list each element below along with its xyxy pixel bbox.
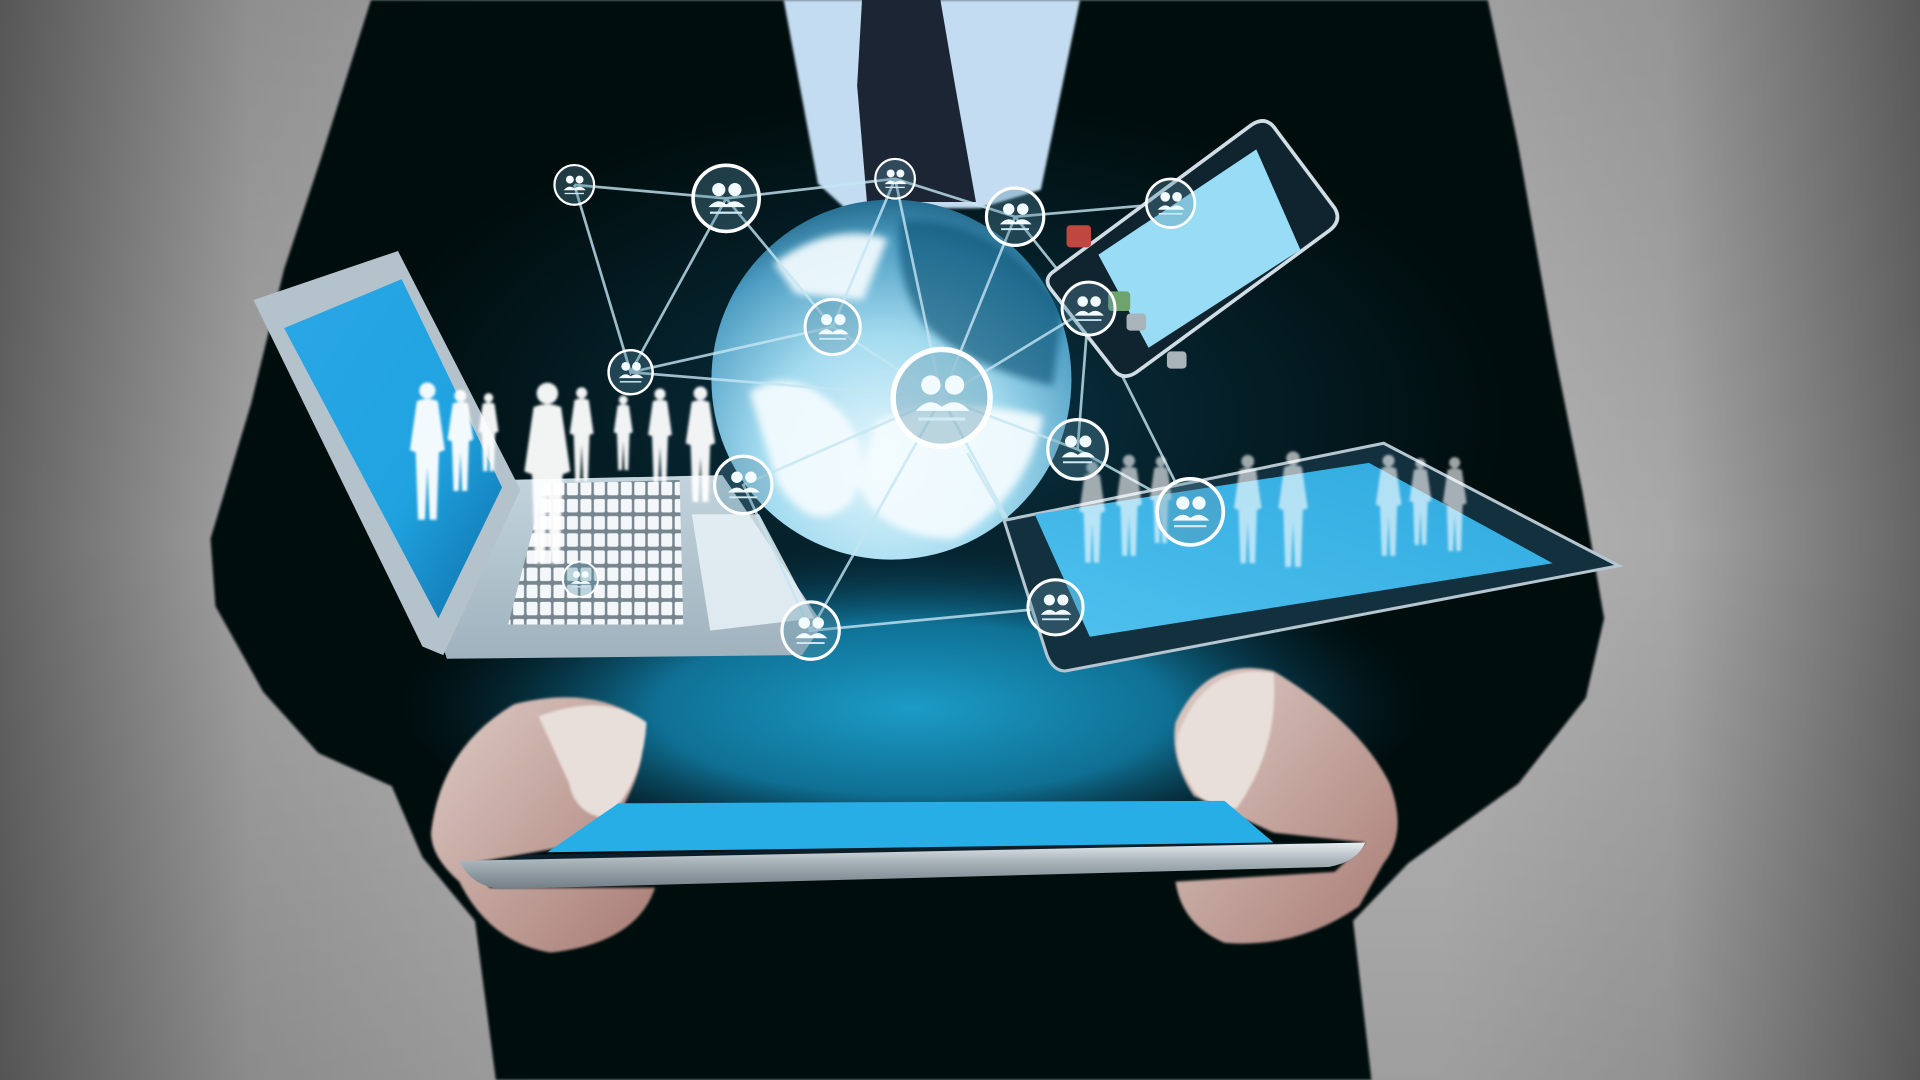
right hand [1174,668,1398,944]
laptop keyboard [508,480,683,624]
blue haze behind the devices [355,98,1506,735]
globe [711,200,1071,560]
laptop touchpad area [692,514,814,631]
laptop [253,251,823,659]
laptop lid frame [253,251,520,655]
globe dark landmass [899,220,1063,386]
globe continents [749,233,1043,539]
network nodes [554,159,1223,659]
app icons [1067,225,1187,369]
left thumb highlight [539,705,647,818]
tablet floating right [1004,443,1619,671]
smartphone [1047,121,1337,376]
people silhouettes on laptop [410,383,715,563]
tablet dark bezel [490,842,1347,862]
tablet screen [1035,463,1553,637]
laptop base [438,475,823,659]
tie [857,0,976,202]
tablet silver edge [459,842,1365,889]
right thumb highlight [1177,672,1274,808]
network lines [574,179,1190,631]
shirt [784,0,1080,208]
phone body [1047,121,1337,376]
laptop screen [284,279,502,618]
businessman suit silhouette [211,0,1604,1080]
left hand [431,697,655,953]
phone screen [1098,149,1300,348]
tablet body [1004,443,1619,671]
people silhouettes on tablet [1079,451,1467,567]
blue projection glow [398,520,1427,863]
tablet screen [547,801,1273,852]
holding tablet [459,801,1365,889]
